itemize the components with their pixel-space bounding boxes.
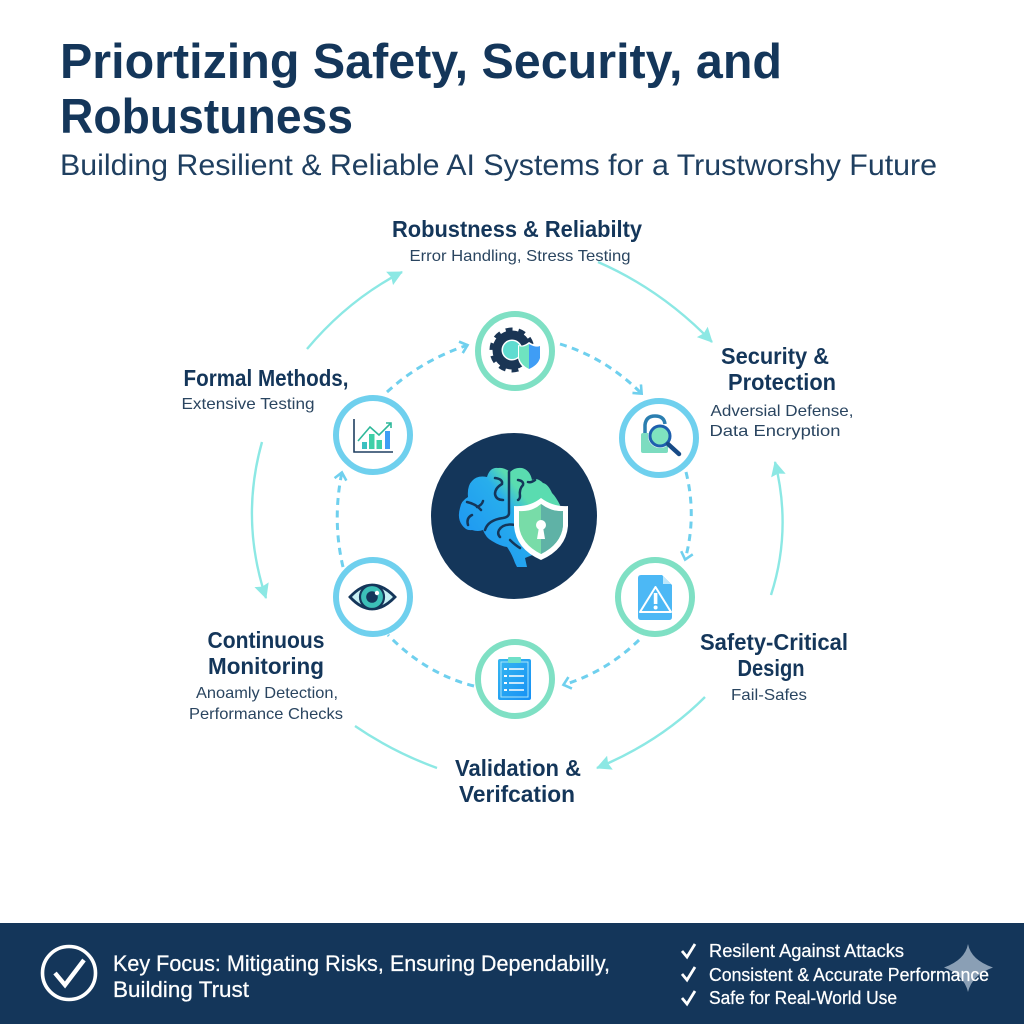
icon: clipboard checklist [478,642,552,716]
label: safety-critical design [700,629,848,704]
label: robustness and reliability: Robustness & Reliabilty [392,216,642,242]
icon: eye [336,560,410,634]
label: validation and verification: Validation & [455,755,581,781]
label: robustness and reliability [392,216,642,265]
footer checklist: Consistent & Accurate Performance [709,965,989,985]
key focus text: Building Trust [113,977,249,1002]
label: continuous monitoring: Anoamly Detection, [196,685,338,702]
label: security and protection: Data Encryption [710,423,840,440]
label: formal methods: Formal Methods, [184,365,348,391]
label: security and protection: Protection [728,369,836,395]
subtitle: Building Resilient & Reliable AI Systems for a Trustworshy Future [60,149,937,182]
key focus text: Key Focus: Mitigating Risks, Ensuring Dependabilly, [113,951,610,976]
icon: central brain and shield [431,433,597,599]
icon: growth chart [336,398,410,472]
label: validation and verification: Verifcation [459,781,575,807]
title: Priortizing Safety, Security, and [60,35,782,89]
label: formal methods: Extensive Testing [182,396,314,413]
label: safety-critical design: Fail-Safes [731,687,807,704]
label: continuous monitoring: Monitoring [208,653,324,679]
inner dashed cycle arrows [337,344,691,686]
icon: gear and shield [478,314,552,388]
label: safety-critical design: Safety-Critical [700,629,848,655]
label: security and protection: Adversial Defense, [710,403,854,420]
title [60,35,782,144]
label: continuous monitoring: Continuous [208,627,324,653]
label: safety-critical design: Design [738,655,804,681]
icon: footer check badge [42,946,96,1000]
label: formal methods [182,365,348,413]
footer band [0,923,1024,1024]
title: Robustuness [60,90,353,144]
label: robustness and reliability: Error Handling, Stress Testing [410,248,630,265]
outer cycle arrows [252,262,783,768]
footer checklist: Resilent Against Attacks [709,941,904,961]
label: security and protection [710,343,854,440]
label: security and protection: Security & [721,343,829,369]
label: continuous monitoring: Performance Checks [189,706,343,723]
label: validation and verification [455,755,581,807]
key focus text [113,951,610,1002]
icon: padlock and magnifier [622,401,696,475]
sparkle watermark [944,944,993,992]
label: continuous monitoring [189,627,343,723]
footer checklist: Safe for Real-World Use [709,988,897,1008]
footer checklist [682,941,989,1008]
icon: warning document [618,560,692,634]
